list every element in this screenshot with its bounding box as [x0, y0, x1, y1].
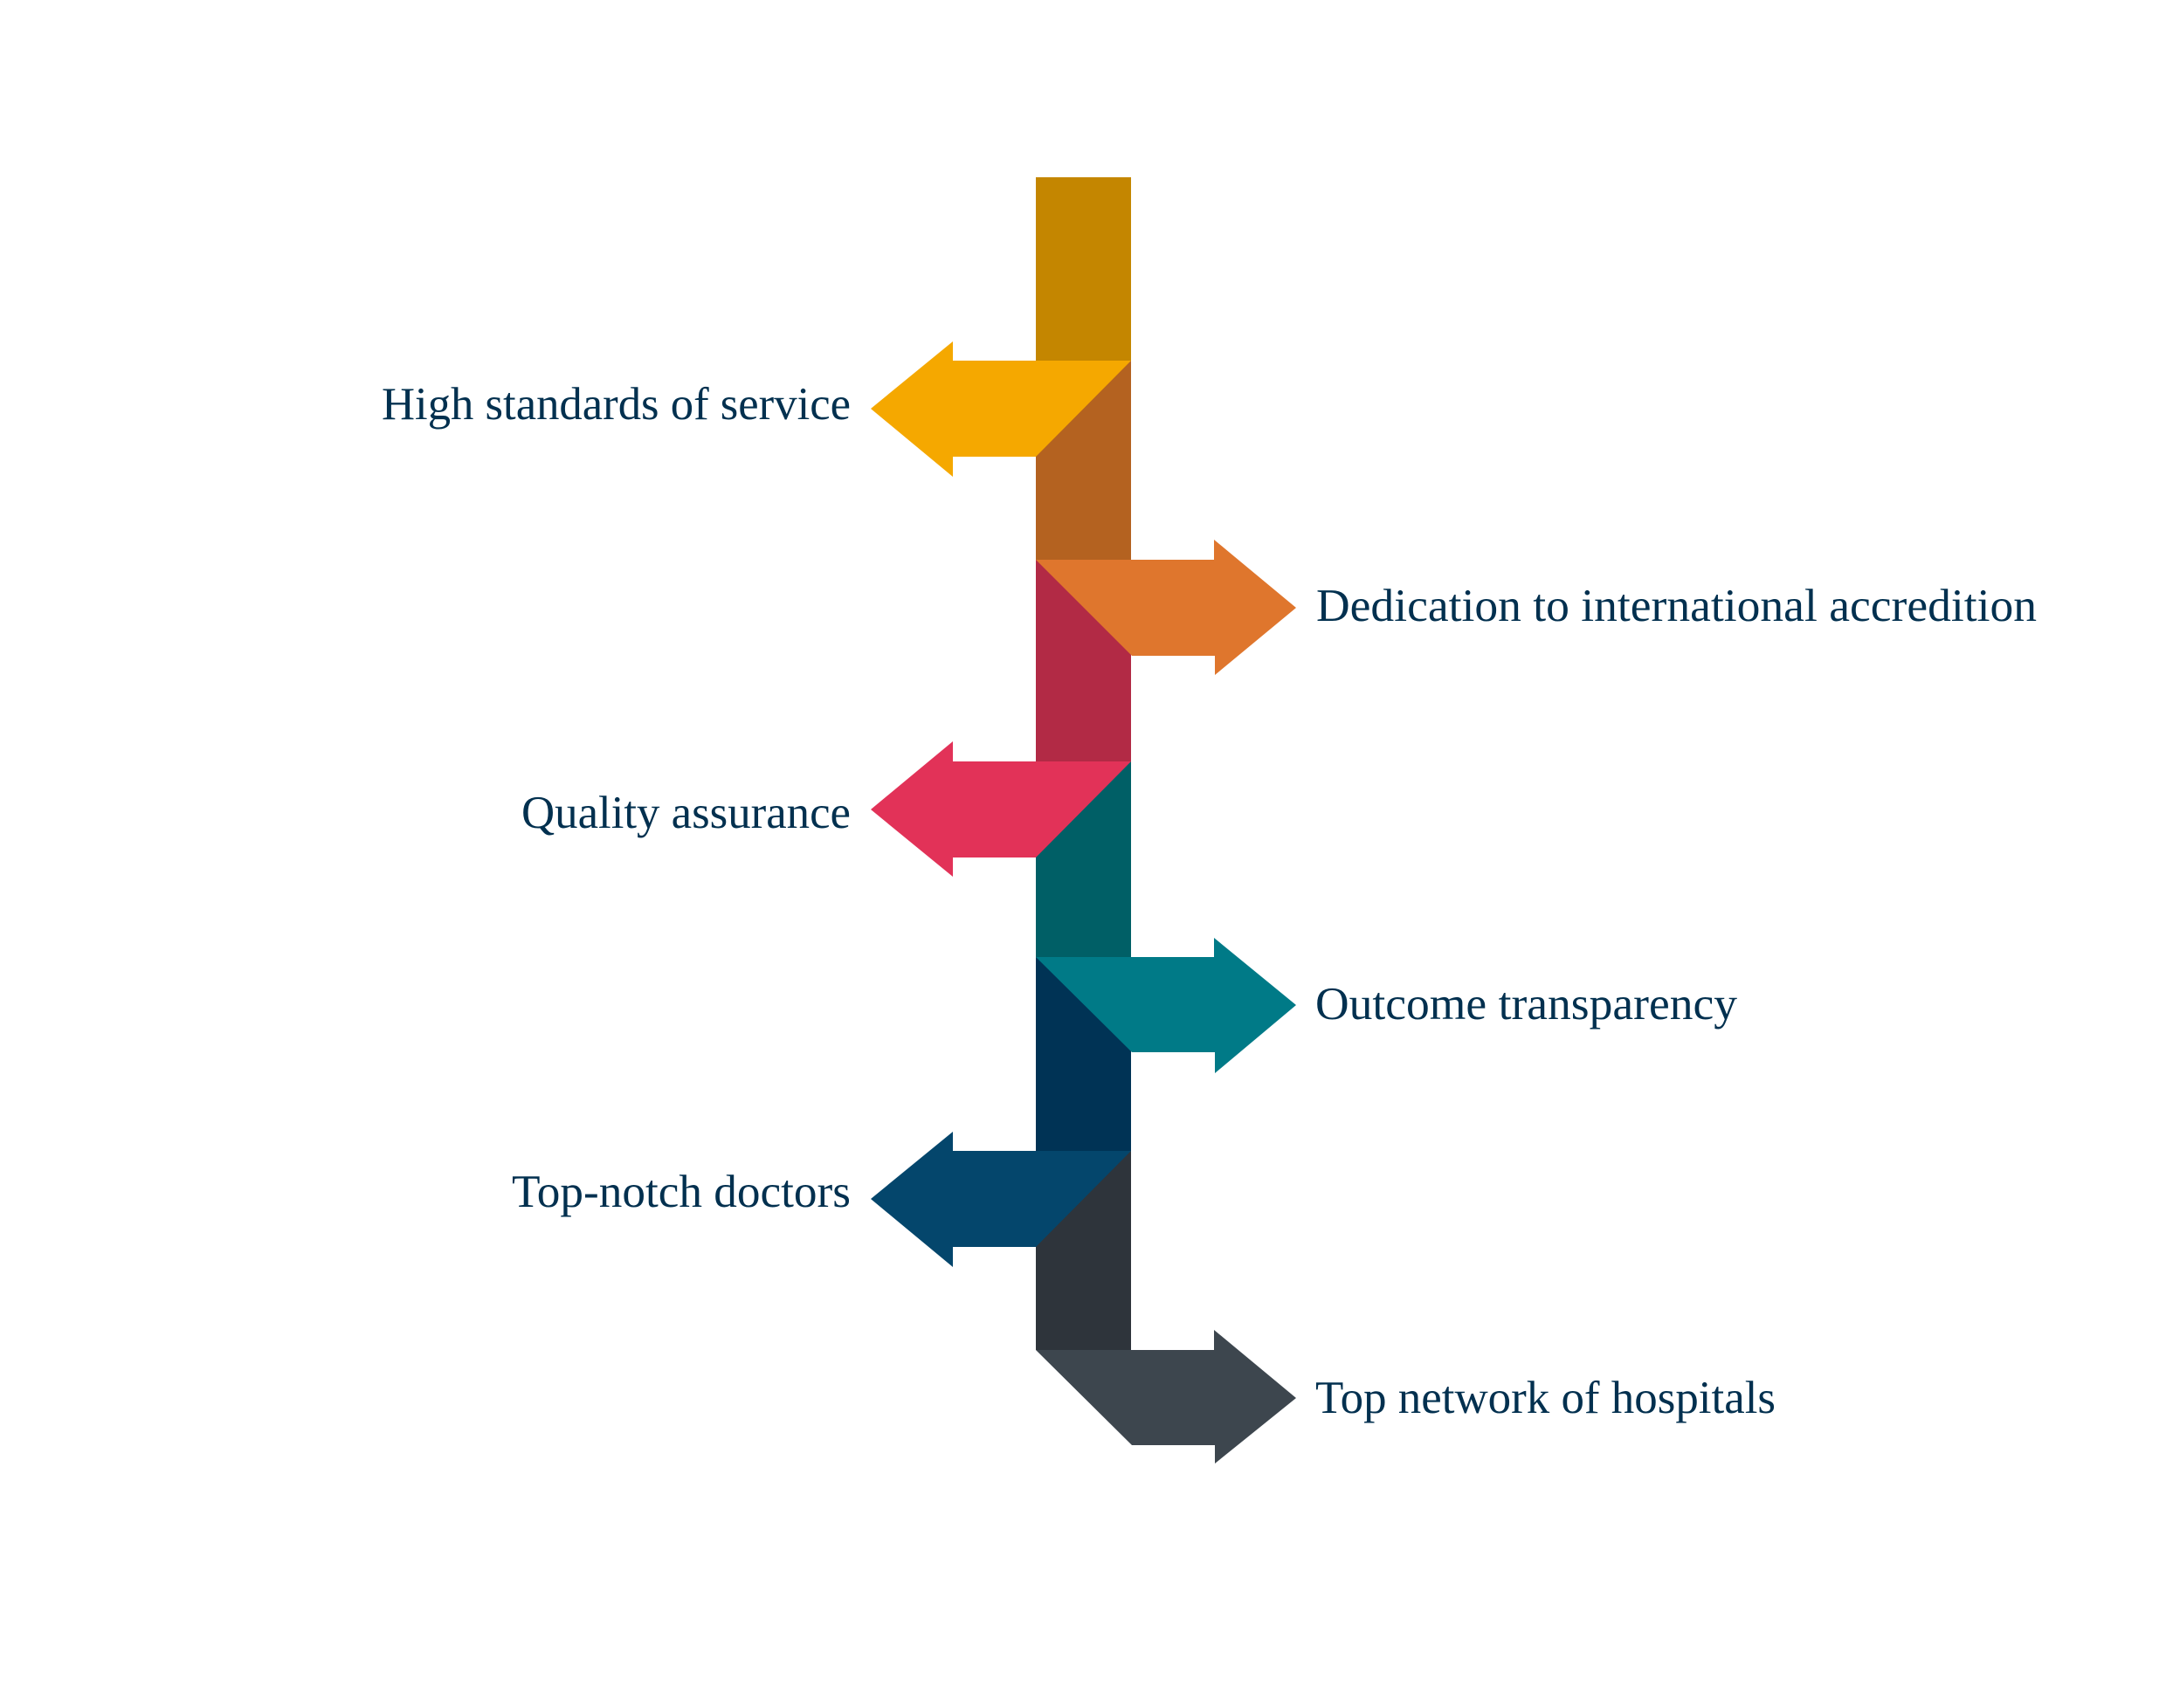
column segment: charcoal: [1036, 1151, 1131, 1350]
column segment: crimson: [1036, 560, 1131, 763]
label: Top network of hospitals: Top network of hospitals: [1315, 1373, 1776, 1423]
column segment: gold: [1036, 177, 1131, 362]
arrow: rose, left: [871, 741, 1131, 877]
column segment: navy: [1036, 957, 1131, 1153]
label: Quality assurance: Quality assurance: [521, 788, 851, 838]
label: Outcome transparency: Outcome transparency: [1315, 979, 1737, 1030]
label: Top-notch doctors: Top-notch doctors: [512, 1167, 851, 1217]
label: Dedication to international accredition: Dedication to international accredition: [1316, 581, 2037, 631]
central column: [1036, 177, 1131, 1350]
label: High standards of service: High standards of service: [382, 379, 851, 430]
arrow: slate, right: [1036, 1330, 1296, 1464]
arrow: teal, right: [1036, 938, 1296, 1073]
arrow: orange, right: [1036, 540, 1296, 675]
arrow: blue, left: [871, 1132, 1131, 1267]
column segment: dark teal: [1036, 761, 1131, 959]
arrow: amber, left: [871, 341, 1131, 477]
column segment: brown: [1036, 361, 1131, 561]
